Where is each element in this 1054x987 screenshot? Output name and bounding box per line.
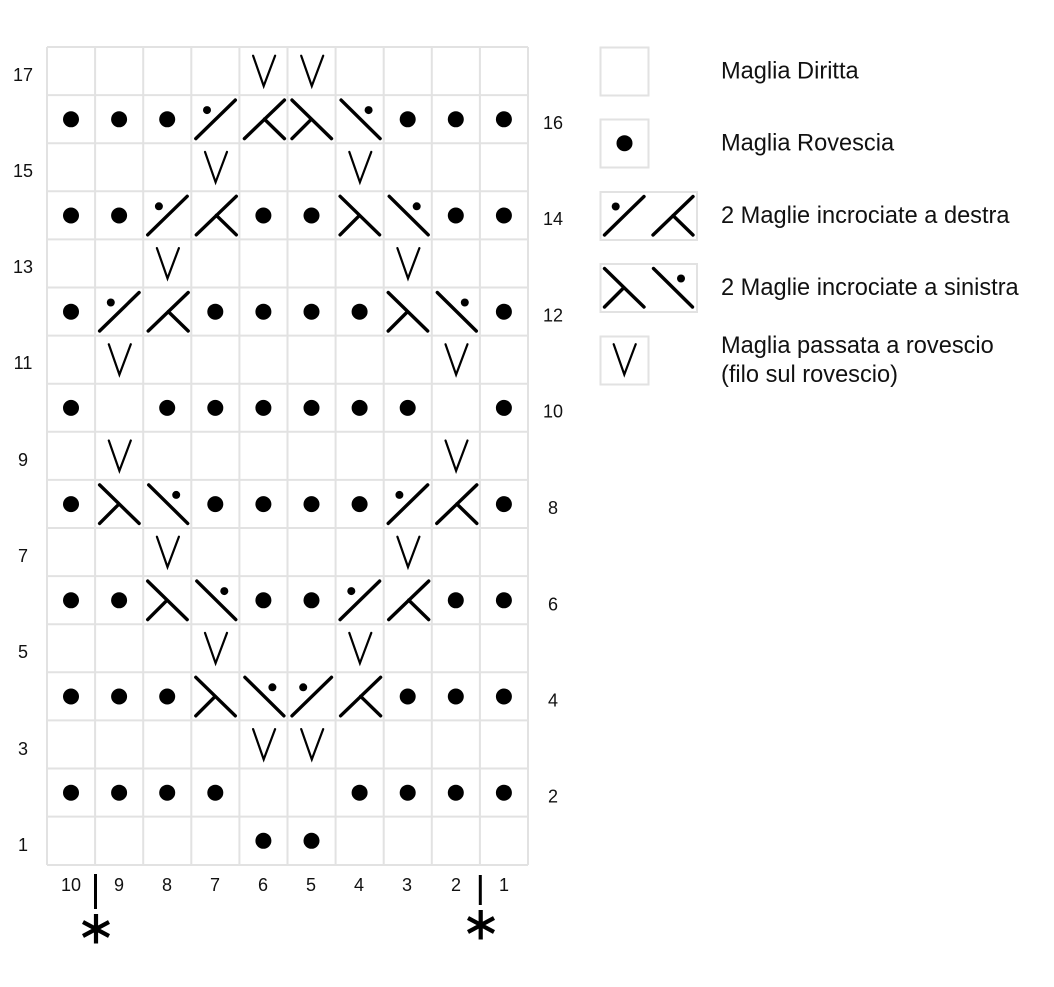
row 6 symbols [63,581,512,620]
legend: slipped stitch: (filo sul rovescio) [721,362,898,388]
even row numbers, right side: 10 [543,402,563,422]
row 15 symbols [205,152,371,182]
row 13 symbols [157,248,419,278]
odd row numbers, left side: 5 [18,642,28,662]
legend: right cross [600,192,1010,240]
even row numbers, right side: 6 [548,594,558,614]
even row numbers, right side: 16 [543,113,563,133]
odd row numbers, left side: 9 [18,450,28,470]
row 10 symbols [63,400,512,416]
row 4 symbols [63,677,512,716]
even row numbers, right side: 2 [548,786,558,806]
legend: left cross [600,264,1020,312]
column numbers, bottom: 1 [499,875,509,895]
column numbers, bottom: 7 [210,875,220,895]
row 3 symbols [253,729,323,759]
odd row numbers, left side: 13 [13,257,33,277]
odd row numbers, left side [13,65,33,855]
row 2 symbols [63,785,512,801]
row 12 symbols [63,292,512,331]
even row numbers, right side: 4 [548,690,558,710]
repeat marker: right line and asterisk [468,875,494,940]
row 7 symbols [157,537,419,567]
legend: right cross: 2 Maglie incrociate a destra [721,203,1010,229]
even row numbers, right side: 12 [543,306,563,326]
even row numbers, right side: 14 [543,209,563,229]
chart grid [47,47,528,865]
column numbers, bottom: 9 [114,875,124,895]
legend: purl stitch: Maglia Rovescia [721,130,895,156]
column numbers, bottom: 5 [306,875,316,895]
column numbers, bottom: 6 [258,875,268,895]
row 8 symbols [63,485,512,523]
legend: slipped stitch: Maglia passata a rovescio [721,333,994,359]
even row numbers, right side [543,113,563,806]
row 5 symbols [205,633,371,663]
column numbers, bottom [61,875,509,895]
legend: slipped stitch [600,333,994,388]
odd row numbers, left side: 3 [18,739,28,759]
odd row numbers, left side: 11 [14,353,32,373]
row 11 symbols [109,344,468,375]
row 17 symbols [253,56,323,86]
column numbers, bottom: 10 [61,875,81,895]
odd row numbers, left side: 17 [13,65,33,85]
legend: purl stitch [600,120,895,168]
odd row numbers, left side: 7 [18,546,28,566]
row 16 symbols [63,100,512,139]
legend: knit stitch [600,48,860,96]
row 1 symbols [255,833,320,849]
even row numbers, right side: 8 [548,498,558,518]
column numbers, bottom: 8 [162,875,172,895]
odd row numbers, left side: 15 [13,161,33,181]
odd row numbers, left side: 1 [18,835,28,855]
column numbers, bottom: 2 [451,875,461,895]
column numbers, bottom: 3 [402,875,412,895]
column numbers, bottom: 4 [354,875,364,895]
legend: knit stitch: Maglia Diritta [721,58,860,84]
row 9 symbols [109,440,468,471]
row 14 symbols [63,196,512,235]
legend: left cross: 2 Maglie incrociate a sinistra [721,275,1020,301]
repeat marker: left line and asterisk [83,874,109,944]
